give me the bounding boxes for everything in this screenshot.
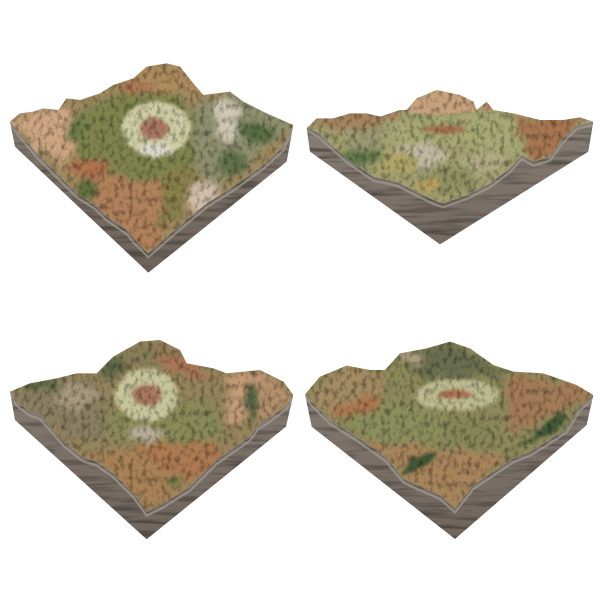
terrain block: top right [306,90,594,244]
crater centre [132,384,161,406]
terrain block: top left [10,63,294,272]
crater rim [122,101,191,157]
crater centre [422,125,465,134]
rock side walls [10,122,294,272]
crater centre [140,118,169,140]
rock side walls [306,122,594,244]
crater rim [415,379,498,411]
terrain block: bottom left [10,340,294,540]
rock side walls [305,394,594,539]
terrain block: bottom right [305,342,594,539]
green valley, right [508,413,568,450]
crater rim [115,368,178,422]
terrain surface [306,90,593,204]
terrain surface [10,340,294,512]
terrain surface [305,342,594,508]
crater centre [438,389,472,399]
rock side walls [10,392,294,540]
mountain peak [407,90,477,115]
terrain surface [10,63,294,254]
illustration: four terrain blocks [10,63,594,540]
green valley, front [402,452,437,475]
